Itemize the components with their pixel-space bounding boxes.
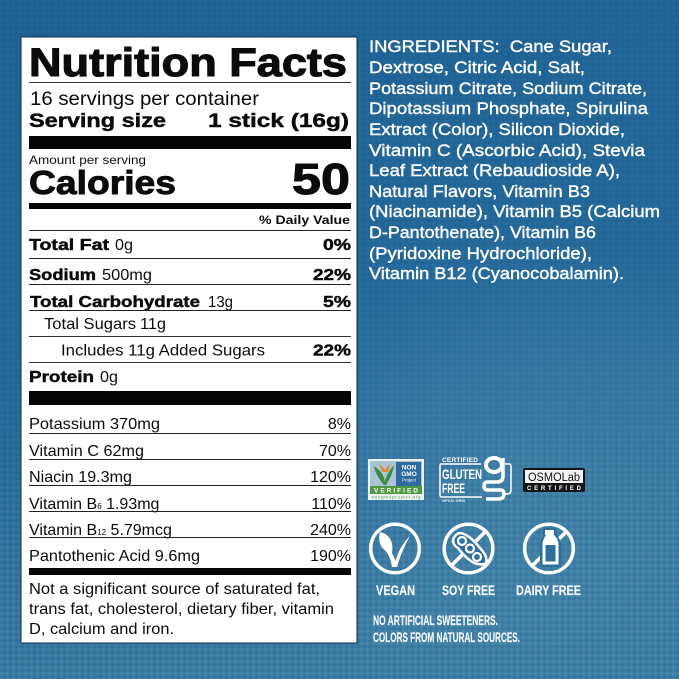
servings text xyxy=(29,88,349,132)
row: vitamin C: Vitamin C 62mg xyxy=(29,443,144,460)
row: niacin: 120% xyxy=(310,469,351,486)
row: total carbohydrate: Total Carbohydrate xyxy=(30,294,200,311)
label: dairy free: DAIRY FREE xyxy=(516,582,581,598)
claims text xyxy=(373,613,520,645)
row: total fat: 0% xyxy=(323,237,351,254)
row: total fat xyxy=(29,237,351,254)
row: total carbohydrate xyxy=(30,294,351,311)
icon: dairy free xyxy=(525,524,573,573)
servings text: Serving size xyxy=(29,110,166,132)
claims text: COLORS FROM NATURAL SOURCES. xyxy=(373,630,520,645)
row: vitamin B12 xyxy=(29,522,351,539)
servings text: 1 stick (16g) xyxy=(208,110,349,132)
row: total fat: Total Fat xyxy=(29,237,110,254)
footnote: D, calcium and iron. xyxy=(29,621,174,638)
row: added sugars: Includes 11g Added Sugars xyxy=(61,342,265,360)
row: vitamin B6 xyxy=(29,496,351,513)
ingredients text: Potassium Citrate, Sodium Citrate, xyxy=(369,79,647,98)
row: vitamin B12: Vitamin B12 5.79mcg xyxy=(29,522,172,539)
badge: Non GMO Project verified: VERIFIED xyxy=(374,488,418,494)
badge: OsmoLab certified: OSMOLab xyxy=(528,472,580,484)
ingredients text: Leaf Extract (Rebaudioside A), xyxy=(369,161,620,180)
servings text: 16 servings per container xyxy=(30,88,260,110)
row: vitamin B6: 110% xyxy=(311,496,351,513)
row: total carbohydrate: 5% xyxy=(323,294,351,311)
ingredients text: (Niacinamide), Vitamin B5 (Calcium xyxy=(369,202,660,221)
footnote: Not a significant source of saturated fat, xyxy=(29,581,320,598)
row: total sugars: 11g xyxy=(140,316,166,333)
icon: soy free xyxy=(444,524,493,573)
badge: certified gluten free: GFCO.ORG xyxy=(442,498,465,503)
footnote: trans fat, cholesterol, dietary fiber, vitamin xyxy=(29,601,334,618)
badge: OsmoLab certified: CERTIFIED xyxy=(527,486,582,492)
row: vitamin C: 70% xyxy=(319,443,351,460)
row: total carbohydrate: 13g xyxy=(208,294,233,311)
calories block: Calories xyxy=(29,164,176,201)
row: potassium: 8% xyxy=(328,416,351,433)
row: sodium: 500mg xyxy=(102,267,152,284)
calories block: Amount per serving xyxy=(29,153,146,167)
badge: OsmoLab certified xyxy=(523,468,585,492)
badge: certified gluten free: CERTIFIED xyxy=(442,457,478,464)
label: vegan: VEGAN xyxy=(376,582,415,598)
calories block: 50 xyxy=(292,155,350,204)
row: protein xyxy=(29,369,118,386)
footnote xyxy=(29,581,334,638)
badge: Non GMO Project verified: NON xyxy=(402,464,417,472)
badge: certified gluten free xyxy=(440,457,511,503)
row: vitamin B12: 240% xyxy=(310,522,351,539)
row: niacin: Niacin 19.3mg xyxy=(29,469,132,486)
badge: Non GMO Project verified: GMO xyxy=(401,471,417,478)
row: sodium: 22% xyxy=(313,267,351,284)
ingredients text: (Pyridoxine Hydrochloride), xyxy=(369,244,592,263)
ingredients text xyxy=(369,37,660,283)
badge: Non GMO Project verified xyxy=(368,459,424,500)
claims text: NO ARTIFICIAL SWEETENERS. xyxy=(373,613,498,628)
panel: nutrition facts label xyxy=(21,37,357,643)
row: potassium xyxy=(29,416,351,433)
row: total fat: 0g xyxy=(115,237,133,254)
ingredients text: Vitamin B12 (Cyanocobalamin). xyxy=(369,264,624,283)
ingredients text: Extract (Color), Silicon Dioxide, xyxy=(369,120,625,139)
ingredients text: Natural Flavors, Vitamin B3 xyxy=(369,182,590,201)
badge: Non GMO Project verified: nongmoproject.org xyxy=(372,494,421,500)
ingredients text: INGREDIENTS: Cane Sugar, xyxy=(369,37,612,56)
badge: Non GMO Project verified: Project xyxy=(402,478,417,482)
badge: certified gluten free: GLUTEN xyxy=(442,466,482,482)
ingredients text: Dipotassium Phosphate, Spirulina xyxy=(369,99,649,118)
row: pantothenic acid: Pantothenic Acid 9.6mg xyxy=(29,548,200,565)
daily value header: % Daily Value xyxy=(259,213,350,227)
row: pantothenic acid: 190% xyxy=(310,548,351,565)
row: vitamin C xyxy=(29,443,351,460)
row: potassium: Potassium 370mg xyxy=(29,416,160,433)
icon: vegan xyxy=(371,524,419,573)
ingredients text: D-Pantothenate), Vitamin B6 xyxy=(369,223,596,242)
row: added sugars: 22% xyxy=(313,342,351,360)
row: added sugars xyxy=(61,342,351,360)
row: niacin xyxy=(29,469,351,486)
row: sodium xyxy=(29,267,351,284)
label: soy free: SOY FREE xyxy=(442,582,495,598)
row: protein: Protein xyxy=(29,369,94,386)
ingredients text: Dextrose, Citric Acid, Salt, xyxy=(369,58,585,77)
row: total sugars: Total Sugars xyxy=(44,316,136,333)
badge: certified gluten free: FREE xyxy=(442,480,465,496)
row: protein: 0g xyxy=(100,369,118,386)
row: vitamin B6: Vitamin B6 1.93mg xyxy=(29,496,159,513)
ingredients text: Vitamin C (Ascorbic Acid), Stevia xyxy=(369,141,646,160)
row: pantothenic acid xyxy=(29,548,351,565)
heading: Nutrition Facts: Nutrition Facts xyxy=(29,41,347,85)
calories block xyxy=(29,153,350,204)
row: sodium: Sodium xyxy=(29,267,96,284)
